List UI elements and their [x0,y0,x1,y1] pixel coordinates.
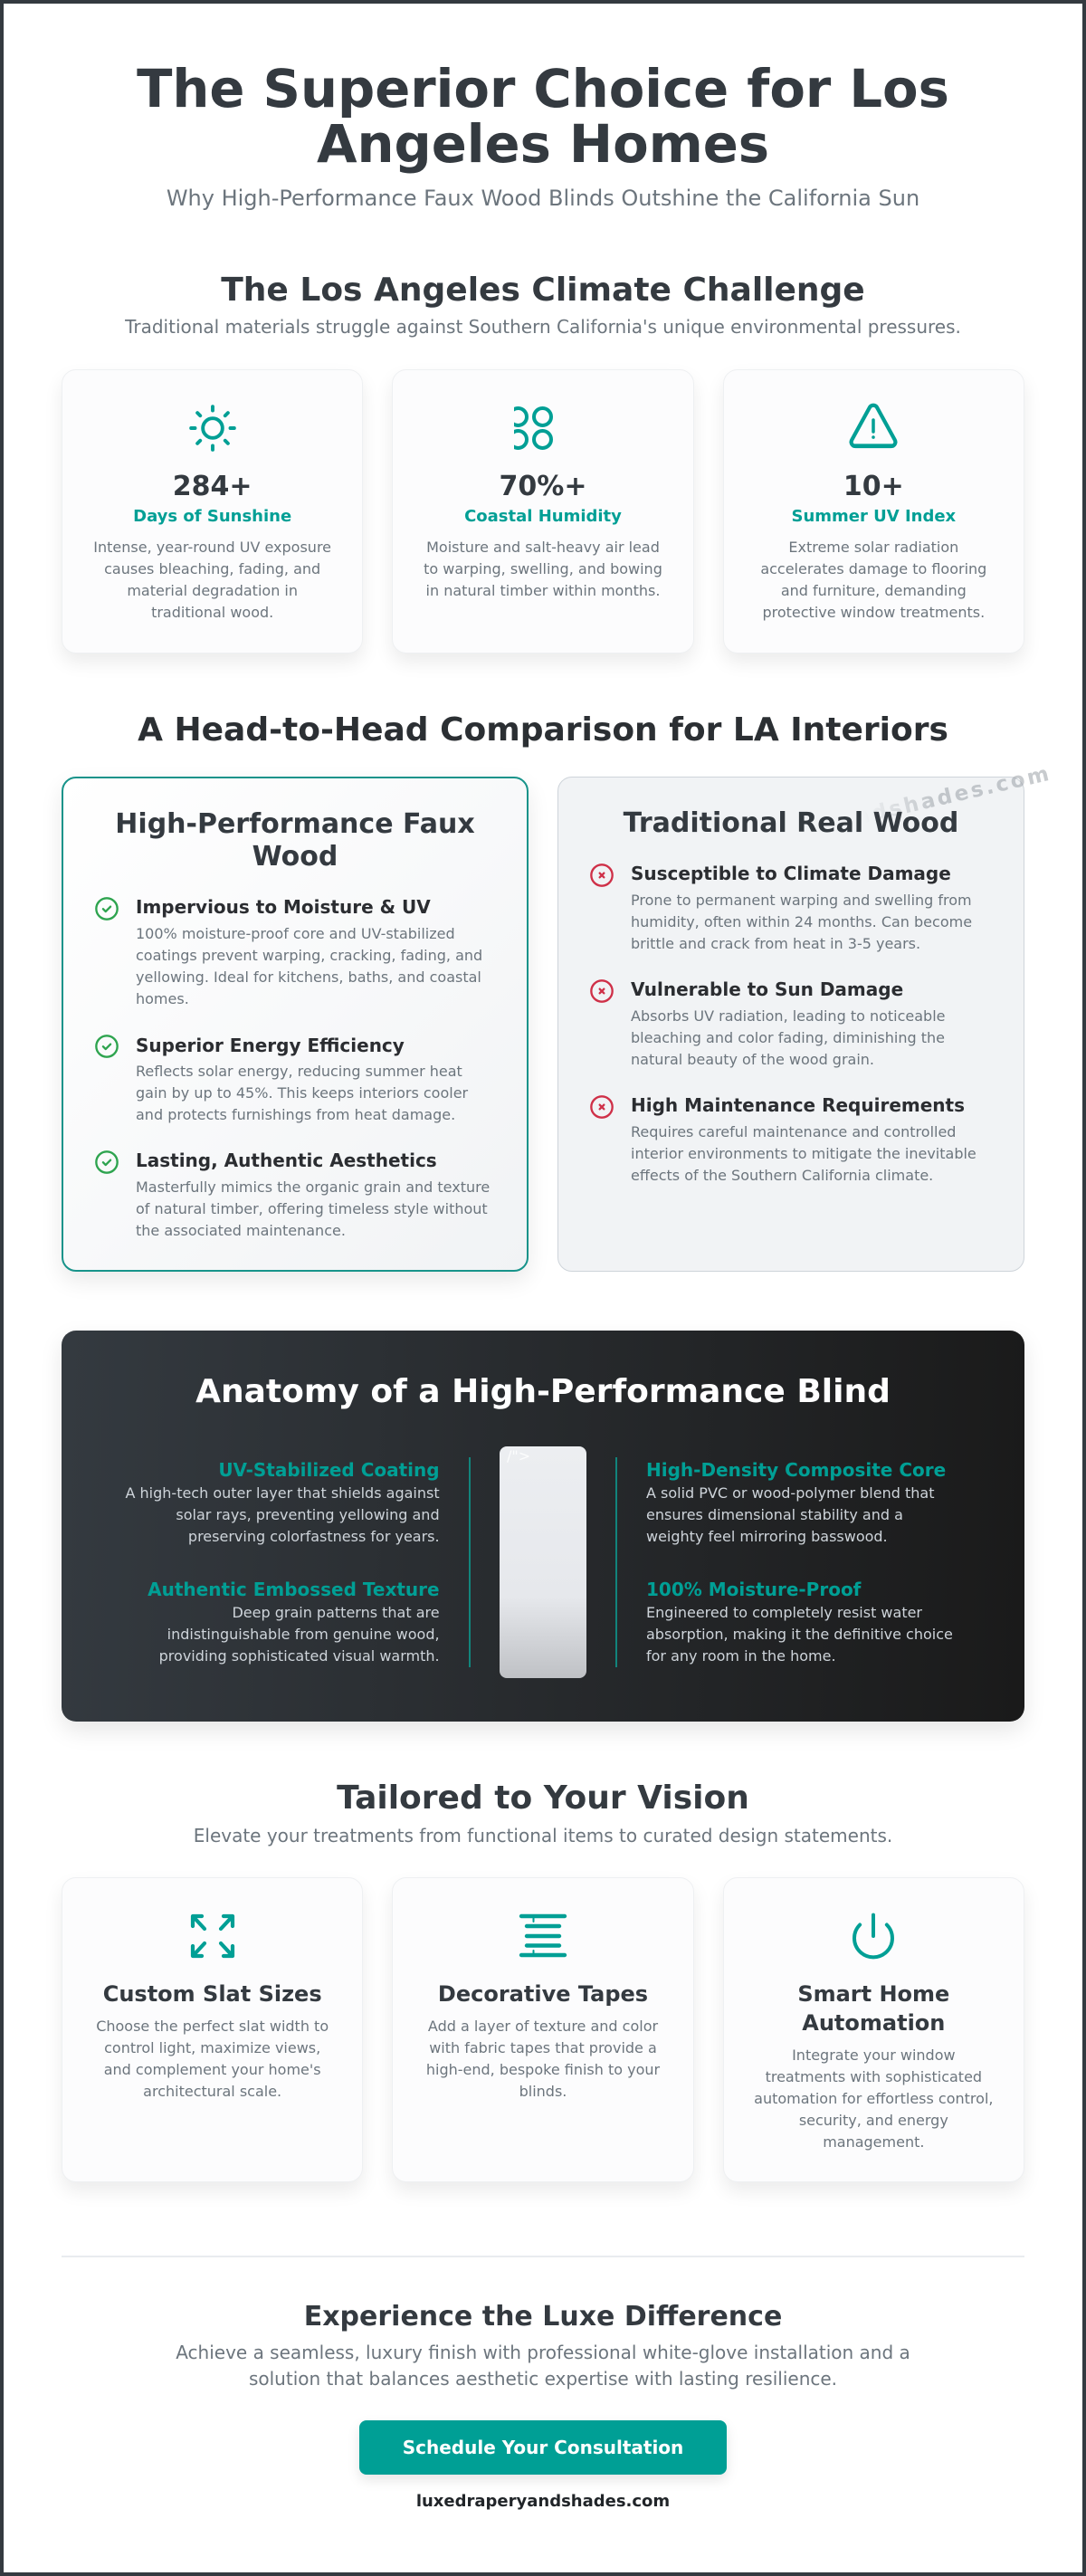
description: automation for effortless control, [754,2089,993,2107]
card title: Automation [802,2009,945,2035]
description: Add a layer of texture and color [428,2017,658,2035]
panel: custom slat sizes [62,1877,363,2182]
description: control light, maximize views, [104,2038,320,2056]
feature text: preserving colorfastness for years. [188,1528,440,1545]
icon: tape lines [519,1913,567,1957]
drawback text: natural beauty of the wood grain. [631,1051,874,1068]
drawback text: effects of the Southern California climate. [631,1167,933,1184]
panel: smart home automation [723,1877,1024,2182]
feature text: ensures dimensional stability and a [646,1506,903,1523]
section intro: climate challenge: Traditional materials struggle against Southern California's unique environmental pressures. [125,316,961,338]
description: in natural timber within months. [426,581,660,599]
feature text: Engineered to completely resist water [646,1604,922,1621]
feature title: UV-Stabilized Coating [218,1459,440,1481]
stat label: Summer UV Index [791,507,956,525]
description: and complement your home's [104,2060,321,2078]
watermark: ndshades.com [853,762,1053,830]
description: causes bleaching, fading, and [104,559,320,577]
benefit text [136,1178,490,1239]
drawback text: Requires careful maintenance and controlled [631,1123,956,1140]
connector line left [469,1457,471,1667]
feature text: Deep grain patterns that are [232,1604,440,1621]
subtitle: Why High-Performance Faux Wood Blinds Outshine the California Sun [167,186,919,211]
feature text [646,1484,934,1545]
heading: tailored: Tailored to Your Vision [337,1779,749,1816]
benefit title: Impervious to Moisture & UV [136,896,431,918]
benefit title: Lasting, Authentic Aesthetics [136,1150,437,1171]
benefit text: coatings prevent warping, cracking, fading, and [136,947,482,964]
feature text: for any room in the home. [646,1647,836,1665]
benefit: moisture and UV [95,896,482,1007]
closing text [62,2340,1024,2392]
stat: 10+: 10+ [843,471,904,502]
feature text: weighty feel mirroring basswood. [646,1528,888,1545]
panel: coastal humidity [392,369,694,654]
stray markup text: /"> [507,1447,530,1465]
drawback: sun damage [590,978,945,1068]
benefit title: Superior Energy Efficiency [136,1035,405,1056]
feature text: A solid PVC or wood-polymer blend that [646,1484,934,1502]
closing text: Achieve a seamless, luxury finish with professional white-glove installation and a [176,2342,910,2363]
connector line right [615,1457,617,1667]
description: with fabric tapes that provide a [429,2038,657,2056]
drawback: climate damage [590,863,972,952]
feature text: providing sophisticated visual warmth. [159,1647,440,1665]
benefit text: and protects furnishings from heat damage. [136,1106,455,1123]
benefit text: Reflects solar energy, reducing summer heat [136,1063,462,1080]
feature title: Authentic Embossed Texture [148,1579,440,1600]
description [724,2044,1024,2152]
description [96,2017,329,2100]
icon: check [95,1150,119,1174]
drawback text: brittle and crack from heat in 3-5 years. [631,935,920,952]
description: blinds. [519,2082,567,2100]
heading: comparison: A Head-to-Head Comparison for LA Interiors [138,711,948,749]
drawback title: Vulnerable to Sun Damage [631,978,903,1000]
card title: Decorative Tapes [438,1980,648,2006]
benefit text: yellowing. Ideal for kitchens, baths, and coastal [136,968,481,986]
feature title: High-Density Composite Core [646,1459,946,1481]
drawback text: interior environments to mitigate the inevitable [631,1145,976,1162]
icon: expand arrows [190,1913,235,1959]
benefit text: gain by up to 45%. This keeps interiors cooler [136,1084,468,1102]
drawback text: humidity, often within 24 months. Can become [631,913,972,930]
panel heading: High-Performance Faux [115,808,475,840]
card title: Custom Slat Sizes [103,1980,322,2006]
description: treatments with sophisticated [766,2067,982,2085]
icon: humidity rings [514,406,553,450]
feature text: solar rays, preventing yellowing and [176,1506,440,1523]
drawback text: Absorbs UV radiation, leading to noticeable [631,1007,945,1025]
description: architectural scale. [143,2082,281,2100]
benefit text: homes. [136,990,189,1007]
title: The Superior Choice for Los [137,59,949,119]
title: Angeles Homes [317,114,769,175]
benefit text [136,925,482,1007]
description: Integrate your window [792,2046,956,2064]
feature: moisture proof [646,1579,953,1665]
drawback text [631,1007,945,1068]
icon: power [853,1913,894,1959]
description [424,538,662,599]
description: material degradation in [127,581,298,599]
feature text: indistinguishable from genuine wood, [167,1626,440,1643]
feature text: absorption, making it the definitive choice [646,1626,953,1643]
call-to-action button [359,2420,727,2475]
description: Moisture and salt-heavy air lead [426,538,660,556]
icon: check [95,1035,119,1058]
benefit text: the associated maintenance. [136,1222,346,1239]
stat label: Days of Sunshine [133,507,291,525]
benefit: energy efficiency [95,1035,469,1123]
feature: UV coating [125,1459,440,1545]
description: Intense, year-round UV exposure [93,538,331,556]
icon: check [95,897,119,921]
description: protective window treatments. [762,603,985,621]
drawback text [631,1123,976,1184]
panel heading: Anatomy of a High-Performance Blind [195,1373,891,1410]
heading: climate challenge: The Los Angeles Climate Challenge [221,272,865,308]
benefit text: 100% moisture-proof core and UV-stabilized [136,925,455,942]
feature title: 100% Moisture-Proof [646,1579,861,1600]
description: high-end, bespoke finish to your [426,2060,660,2078]
description: to warping, swelling, and bowing [424,559,662,577]
feature text [125,1484,440,1545]
feature text: A high-tech outer layer that shields against [125,1484,440,1502]
section intro: tailored: Elevate your treatments from functional items to curated design statements. [194,1825,892,1846]
description: and furniture, demanding [781,581,967,599]
panel heading [115,808,475,873]
benefit: aesthetics [95,1150,490,1239]
heading: closing: Experience the Luxe Difference [304,2301,782,2333]
icon: warning triangle [849,404,898,449]
feature: composite core [646,1459,946,1545]
card title [724,1979,1024,2037]
feature text [646,1604,953,1665]
description [760,538,986,621]
description: management. [823,2132,924,2151]
drawback text: bleaching and color fading, diminishing the [631,1029,945,1046]
website: luxedraperyandshades.com [416,2492,670,2511]
drawback text [631,892,972,952]
stat label: Coastal Humidity [464,507,622,525]
stat: 284+: 284+ [173,471,252,502]
benefit text [136,1063,469,1123]
stat: 70%+: 70%+ [500,471,586,502]
drawback text: Prone to permanent warping and swelling from [631,892,972,909]
panel: traditional real wood [557,777,1024,1272]
feature: embossed texture [148,1579,440,1665]
description: traditional wood. [151,603,273,621]
card title: Smart Home [797,1980,949,2006]
description: Extreme solar radiation [788,538,958,556]
icon: sun [189,405,236,452]
benefit text: of natural timber, offering timeless style without [136,1200,488,1217]
icon: cross [590,1095,614,1119]
panel: days of sunshine [62,369,363,654]
description: security, and energy [799,2111,948,2129]
panel: summer UV index [723,369,1024,654]
benefit text: Masterfully mimics the organic grain and texture [136,1178,490,1196]
drawback title: Susceptible to Climate Damage [631,863,951,884]
icon: cross [590,979,614,1003]
blind slat illustration [500,1446,586,1678]
panel: blind anatomy [62,1331,1024,1722]
title [137,59,949,175]
panel: high-performance faux wood [62,777,529,1272]
panel heading: Wood [252,841,338,873]
description: Choose the perfect slat width to [96,2017,329,2035]
description: accelerates damage to flooring [760,559,986,577]
drawback: maintenance [590,1094,976,1184]
drawback title: High Maintenance Requirements [631,1094,965,1116]
description [93,538,331,621]
panel: decorative tapes [392,1877,694,2182]
panel heading: Traditional Real Wood [624,807,958,839]
icon: cross [590,863,614,887]
closing text: solution that balances aesthetic expertise with lasting resilience. [249,2368,837,2390]
description [426,2017,661,2100]
call-to-action button: Schedule Your Consultation [403,2437,683,2458]
feature text [159,1604,440,1665]
